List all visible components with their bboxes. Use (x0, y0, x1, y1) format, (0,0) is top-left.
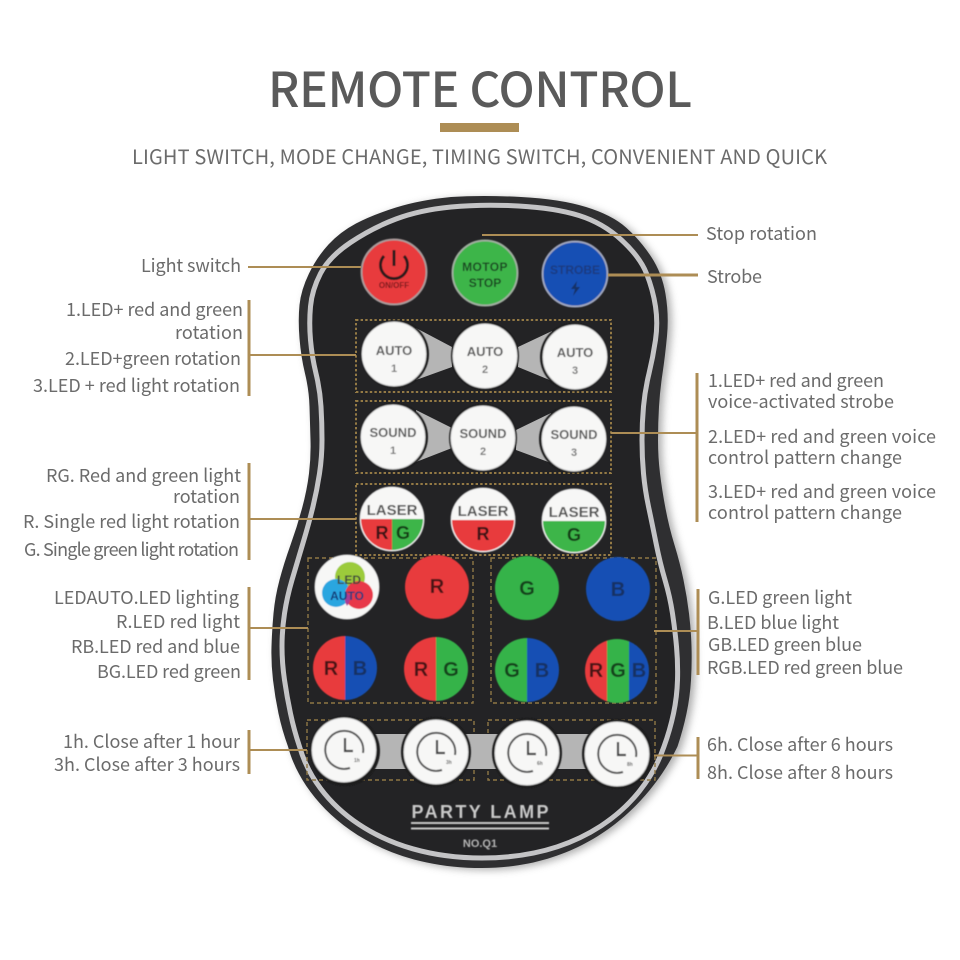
mixed colour LED buttons: G (504, 660, 520, 682)
callout: sound modes: control pattern change (708, 444, 902, 470)
motor stop button: STOP (469, 276, 501, 290)
callout: LED colours left: RB.LED red and blue (71, 633, 240, 659)
callout: LED colours right (654, 584, 903, 680)
timer buttons: 3h (446, 760, 452, 766)
callout: timer left (54, 728, 307, 777)
title accent bar (440, 123, 519, 132)
LED auto button: LED (337, 573, 361, 587)
laser buttons (360, 487, 606, 554)
sound buttons: SOUND (370, 425, 416, 440)
title: REMOTE CONTROL (268, 51, 692, 121)
sound buttons: SOUND (551, 427, 597, 442)
mixed colour LED buttons: R (414, 659, 429, 681)
callout: laser rotation modes (23, 462, 356, 562)
auto buttons: 3 (572, 365, 578, 377)
auto buttons (361, 320, 608, 391)
callout: LED colours left: BG.LED red green (97, 658, 241, 684)
sound buttons: SOUND (460, 426, 506, 441)
callout: LED colours left: R.LED red light (116, 608, 240, 634)
callout: sound modes: voice-activated strobe (708, 388, 894, 414)
dashed button groups (307, 320, 656, 780)
laser buttons: LASER (367, 502, 418, 519)
auto buttons: AUTO (376, 343, 412, 358)
callout: timer left: 1h. Close after 1 hour (63, 728, 241, 754)
remote body (271, 196, 696, 870)
party lamp label: PARTY LAMP (412, 802, 548, 822)
sound buttons: 3 (571, 447, 577, 459)
callout: sound modes: control pattern change (708, 499, 902, 525)
laser buttons: G (567, 525, 581, 545)
LED auto button: AUTO (330, 589, 364, 603)
mixed colour LED buttons: B (632, 660, 646, 682)
mixed colour LED buttons: R (589, 660, 604, 682)
callout: sound modes: 3.LED+ red and green voice (708, 478, 936, 504)
callout: LED rotation modes: rotation (175, 319, 243, 345)
callout: LED colours left (54, 584, 308, 684)
auto buttons: 2 (482, 364, 488, 376)
callout: laser rotation modes: rotation (173, 483, 240, 509)
sound buttons (360, 403, 607, 473)
party lamp label (411, 802, 549, 850)
timer buttons: 1h (354, 758, 360, 764)
callout: LED colours right: G.LED green light (708, 584, 852, 610)
power button (362, 240, 426, 304)
callout: timer right (654, 731, 893, 785)
timer buttons (310, 716, 652, 789)
mixed colour LED buttons (313, 636, 649, 703)
strobe button: STROBE (550, 263, 600, 277)
timer buttons: 6h (537, 761, 543, 767)
callout: laser rotation modes: RG. Red and green light (46, 462, 241, 488)
laser buttons: R (476, 524, 490, 544)
callout: LED rotation modes (33, 296, 356, 398)
laser buttons: LASER (549, 504, 600, 521)
party lamp label: NO.Q1 (463, 838, 497, 850)
single colour LED buttons: G (519, 578, 535, 600)
callout: sound modes: 1.LED+ red and green (708, 367, 884, 393)
callout: sound modes: 2.LED+ red and green voice (708, 423, 936, 449)
remote control (271, 196, 696, 870)
motor stop button: MOTOP (462, 260, 508, 274)
mixed colour LED buttons: B (353, 658, 367, 680)
callout: timer right: 6h. Close after 6 hours (707, 731, 893, 757)
timer buttons: 8h (627, 762, 633, 768)
sound buttons: 2 (480, 446, 486, 458)
callout: LED rotation modes: 1.LED+ red and green (66, 296, 243, 322)
LED auto button (315, 555, 379, 619)
callout: sound modes (611, 367, 936, 525)
callout: LED colours left: LEDAUTO.LED lighting (54, 584, 239, 610)
callout: LED colours right: RGB.LED red green blue (707, 654, 903, 680)
mixed colour LED buttons: B (535, 660, 549, 682)
callout: laser rotation modes: G. Single green light rotation (24, 536, 239, 562)
motor stop button (452, 240, 518, 306)
callout: LED colours right: GB.LED green blue (708, 631, 862, 657)
callout: LED rotation modes: 2.LED+green rotation (65, 345, 241, 371)
single colour LED buttons: B (611, 579, 625, 601)
auto buttons: AUTO (557, 345, 593, 360)
strobe button (542, 242, 608, 306)
callout: stop rotation: Stop rotation (706, 220, 817, 246)
connector shapes between buttons (370, 328, 600, 769)
callout: timer right: 8h. Close after 8 hours (707, 759, 893, 785)
auto buttons: 1 (391, 363, 397, 375)
callout: timer left: 3h. Close after 3 hours (54, 751, 240, 777)
auto buttons: AUTO (467, 344, 503, 359)
callout: light switch: Light switch (141, 252, 241, 278)
laser buttons: G (396, 523, 410, 543)
mixed colour LED buttons: R (324, 658, 339, 680)
callout: laser rotation modes: R. Single red light rotation (23, 508, 240, 534)
single colour LED buttons: R (430, 576, 445, 598)
callout: LED colours right: B.LED blue light (707, 609, 839, 635)
mixed colour LED buttons: G (443, 659, 459, 681)
sound buttons: 1 (390, 445, 396, 457)
callout: LED rotation modes: 3.LED + red light rotation (33, 372, 240, 398)
mixed colour LED buttons: G (610, 660, 626, 682)
laser buttons: R (376, 523, 388, 543)
subtitle: LIGHT SWITCH, MODE CHANGE, TIMING SWITCH, CONVENIENT AND QUICK (132, 141, 827, 170)
single colour LED buttons (405, 555, 650, 621)
power button: ON/OFF (379, 281, 409, 290)
laser buttons: LASER (458, 503, 509, 520)
callout: strobe: Strobe (707, 263, 762, 289)
